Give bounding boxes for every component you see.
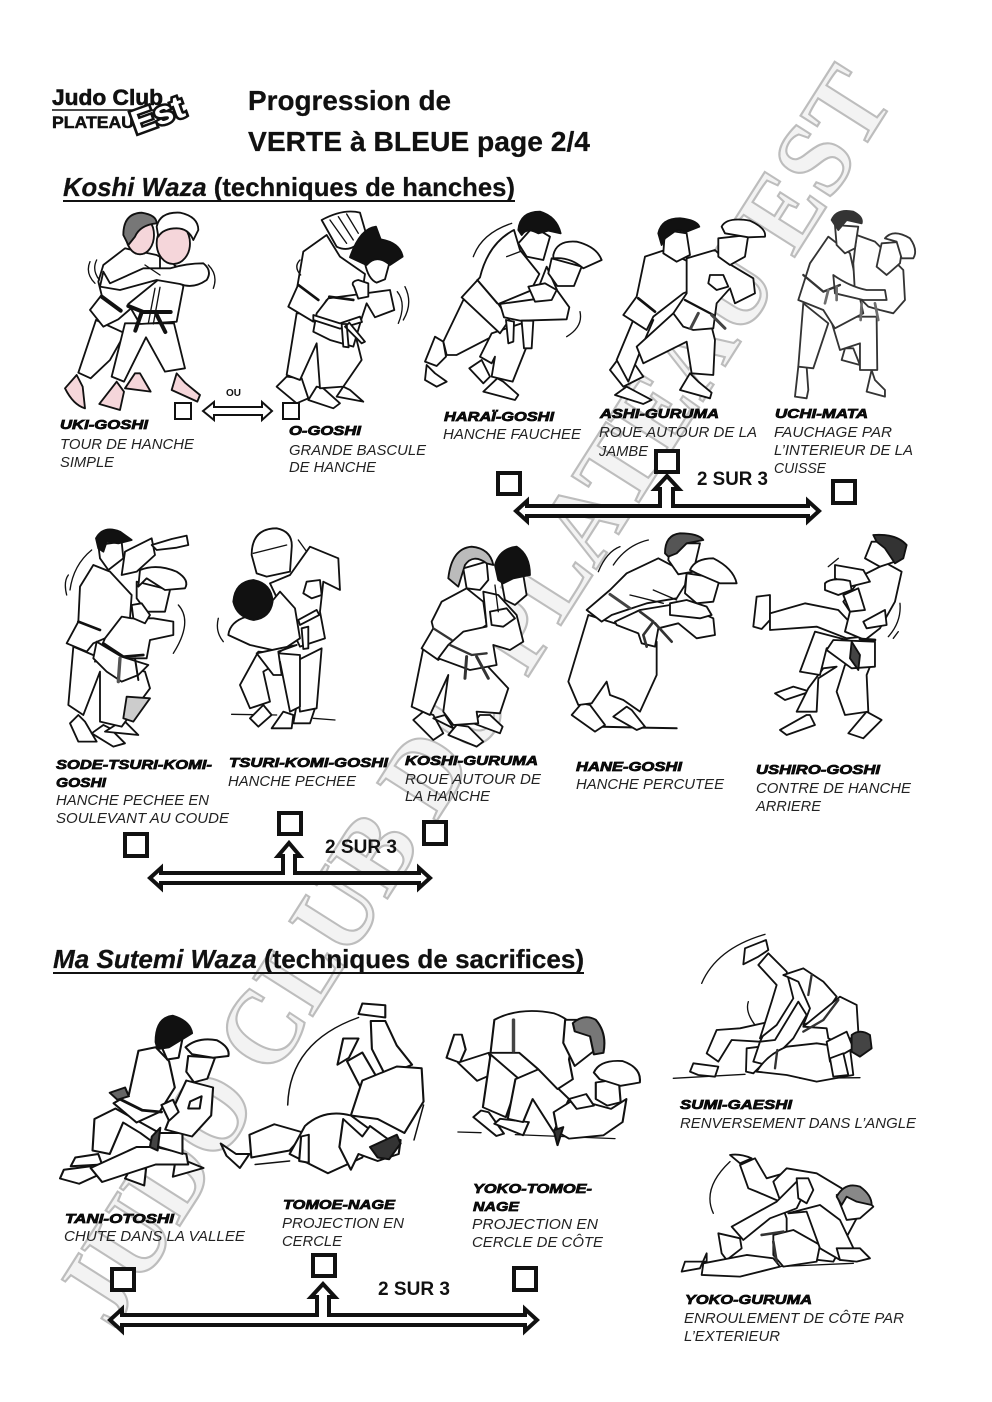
arrow: OU: OU xyxy=(226,388,241,399)
choice group: 2 sur 3 (row 3) xyxy=(110,1255,537,1331)
labels row 1: L’INTERIEUR DE LA xyxy=(774,443,913,459)
illustration: yoko-guruma xyxy=(682,1155,873,1277)
labels row 1 xyxy=(60,406,913,477)
illustration: tani-otoshi xyxy=(60,1016,229,1186)
labels row 1: GRANDE BASCULE xyxy=(289,443,426,459)
labels row 2: LA HANCHE xyxy=(405,789,490,805)
title xyxy=(248,85,590,157)
illustration: ushiro-goshi xyxy=(753,535,907,738)
labels row 2: KOSHI-GURUMA xyxy=(405,753,538,768)
labels row 1: SIMPLE xyxy=(60,455,114,471)
labels row 3: CERCLE xyxy=(282,1234,342,1250)
choice group: 2 sur 3 (row 2) xyxy=(125,813,446,888)
labels row 1: TOUR DE HANCHE xyxy=(60,437,194,453)
labels row 2: CONTRE DE HANCHE xyxy=(756,781,911,797)
labels row 1: UCHI-MATA xyxy=(775,406,868,421)
illustration: o-goshi xyxy=(277,211,409,408)
heading: Ma Sutemi Waza: Ma Sutemi Waza (techniques de sacrifices) xyxy=(53,944,584,974)
labels row 3: CHUTE DANS LA VALLEE xyxy=(64,1229,245,1245)
illustration: uki-goshi xyxy=(65,213,215,410)
illustration: tsuri-komi-goshi xyxy=(217,528,340,728)
illustration: tomoe-nage xyxy=(221,1004,424,1173)
labels row 1: HARAÏ-GOSHI xyxy=(444,409,554,424)
illustration: harai-goshi xyxy=(425,212,602,400)
title: VERTE à BLEUE page 2/4 xyxy=(248,126,590,157)
labels row 1: JAMBE xyxy=(598,444,648,460)
labels row 3: TANI-OTOSHI xyxy=(65,1211,175,1226)
logo: Judo Club Plateau Est xyxy=(52,85,189,141)
labels row 2: SOULEVANT AU COUDE xyxy=(56,811,229,827)
labels row 2: TSURI-KOMI-GOSHI xyxy=(229,755,388,770)
labels row 3: L’EXTERIEUR xyxy=(684,1329,781,1345)
labels row 1: UKI-GOSHI xyxy=(60,417,148,432)
labels row 1: ROUE AUTOUR DE LA xyxy=(599,425,757,441)
arrow: OU xyxy=(203,388,272,420)
labels row 1: O-GOSHI xyxy=(289,423,361,438)
labels row 3: YOKO-GURUMA xyxy=(685,1292,812,1307)
labels row 2: GOSHI xyxy=(56,775,106,790)
choice group: 2 sur 3 (row 2): 2 SUR 3 xyxy=(325,837,397,858)
logo: Judo Club Plateau Est: Est xyxy=(126,88,189,141)
labels row 3: PROJECTION EN xyxy=(472,1217,599,1233)
labels row 2: HANCHE PECHEE EN xyxy=(56,793,210,809)
heading: Koshi Waza: Koshi Waza (techniques de hanches) xyxy=(63,172,515,202)
labels row 2: SODE-TSURI-KOMI- xyxy=(56,757,212,772)
illustration: hane-goshi xyxy=(568,533,737,732)
choice group: 2 sur 3 (row 3): 2 SUR 3 xyxy=(378,1279,450,1300)
labels row 1: DE HANCHE xyxy=(289,460,376,476)
labels row 2: HANCHE PERCUTEE xyxy=(576,777,724,793)
illustration: ashi-guruma xyxy=(610,218,765,404)
labels row 3: CERCLE DE CÔTE xyxy=(472,1234,603,1251)
labels row 2: HANCHE PECHEE xyxy=(228,774,356,790)
logo: Judo Club Plateau Est: Judo Club xyxy=(52,85,163,110)
labels row 1: HANCHE FAUCHEE xyxy=(443,427,581,443)
illustration: koshi-guruma xyxy=(412,547,530,747)
labels row 3: NAGE xyxy=(473,1199,519,1214)
title: Progression de xyxy=(248,85,451,116)
illustration: sode-tsuri-komi-goshi xyxy=(65,529,188,747)
choice group: 2 sur 3 (row 1): 2 SUR 3 xyxy=(697,469,768,490)
labels row 3: PROJECTION EN xyxy=(282,1216,405,1232)
illustration: yoko-tomoe-nage xyxy=(447,1011,640,1145)
labels row 3: TOMOE-NAGE xyxy=(283,1197,395,1212)
labels row 3: RENVERSEMENT DANS L’ANGLE xyxy=(680,1116,916,1132)
checkboxes: uki-goshi / o-goshi xyxy=(175,403,299,419)
labels row 1: CUISSE xyxy=(774,461,826,477)
labels row 2: HANE-GOSHI xyxy=(576,759,682,774)
labels row 3: SUMI-GAESHI xyxy=(680,1097,793,1112)
illustration: uchi-mata xyxy=(795,211,915,398)
logo: Judo Club Plateau Est: PLATEAU xyxy=(52,113,134,132)
illustration: sumi-gaeshi xyxy=(673,934,872,1082)
labels row 3: YOKO-TOMOE- xyxy=(473,1181,592,1196)
labels row 3 xyxy=(64,1097,916,1345)
labels row 3: ENROULEMENT DE CÔTE PAR xyxy=(684,1310,905,1327)
labels row 2: USHIRO-GOSHI xyxy=(756,762,880,777)
labels row 2 xyxy=(56,753,911,827)
labels row 1: ASHI-GURUMA xyxy=(599,406,719,421)
choice group: 2 sur 3 (row 1) xyxy=(498,451,855,521)
labels row 2: ARRIERE xyxy=(755,799,821,815)
labels row 1: FAUCHAGE PAR xyxy=(774,425,893,441)
labels row 2: ROUE AUTOUR DE xyxy=(405,772,541,788)
